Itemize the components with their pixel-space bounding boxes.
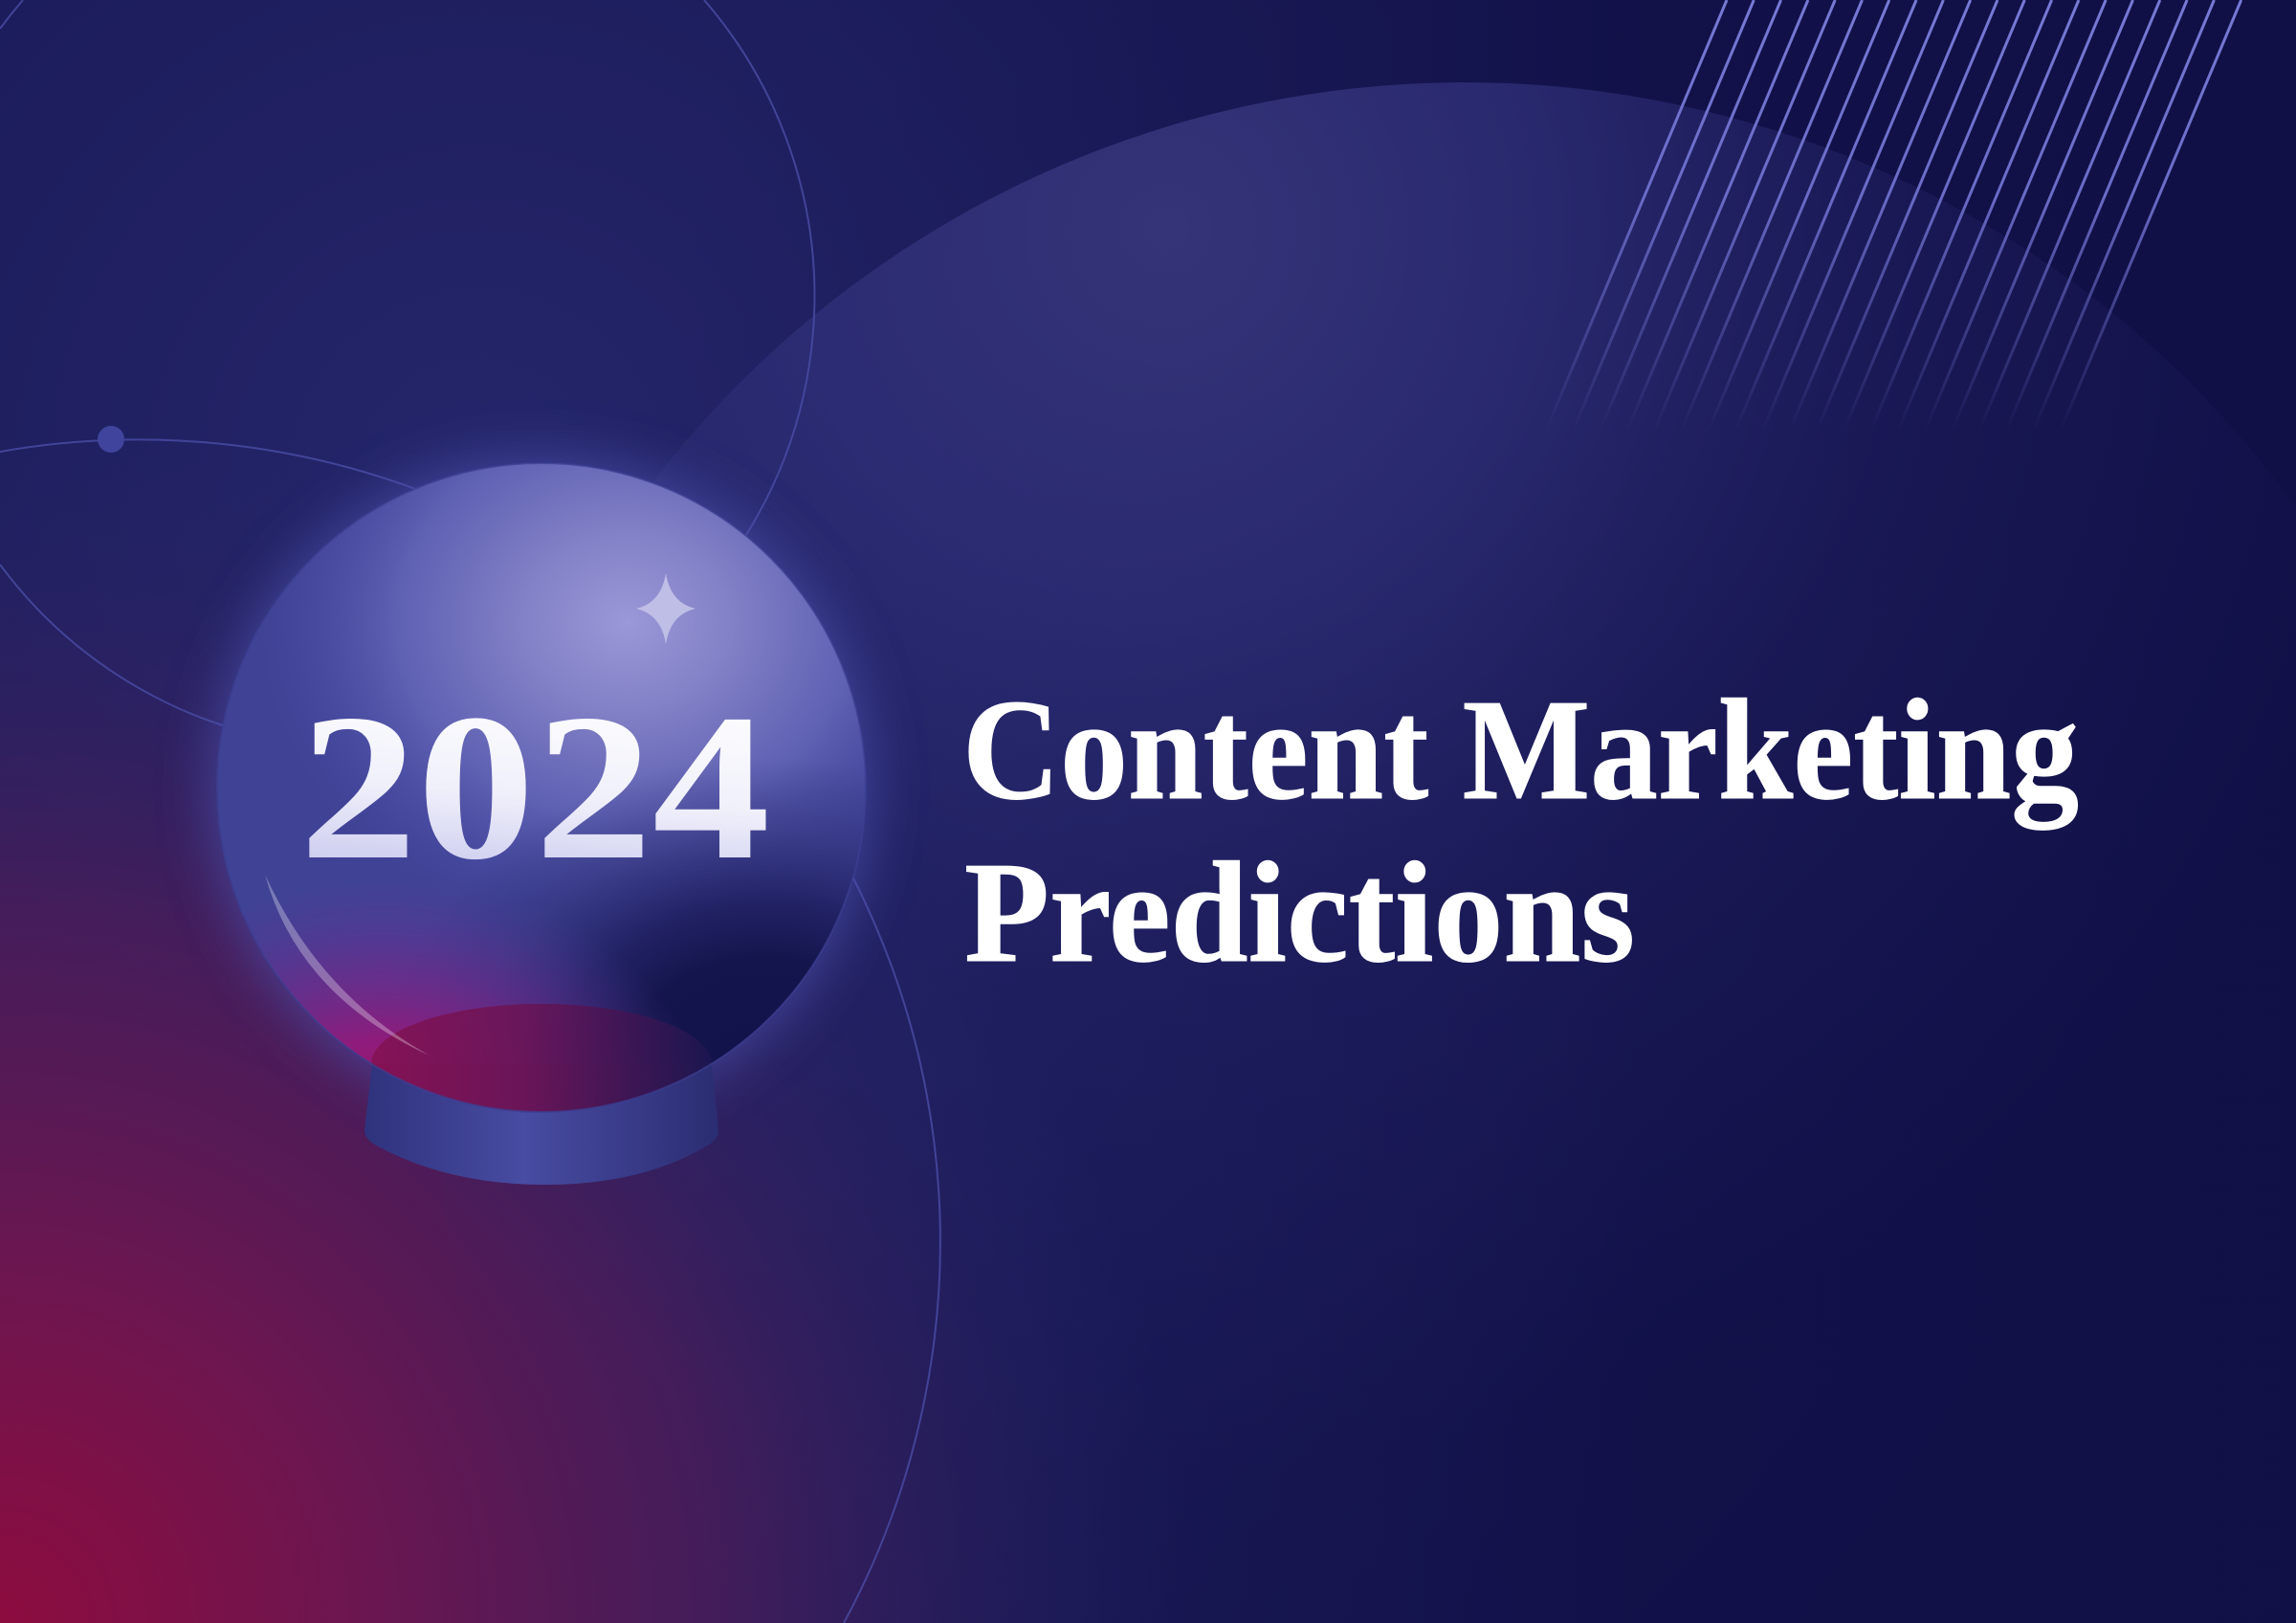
inner stand ellipse: [371, 1004, 712, 1064]
large background circle: [439, 82, 2296, 1623]
ball glow: [211, 457, 872, 1118]
title: Content Marketing: [962, 669, 2079, 830]
glass highlight crescent: [265, 875, 430, 1056]
year label: 2024: [299, 672, 770, 903]
orbit dot: [98, 426, 124, 453]
ball stand: [364, 1064, 718, 1185]
crystal ball: [187, 434, 895, 1185]
title: Predictions: [964, 832, 1635, 992]
sparkle star: [636, 573, 695, 644]
thin orbit circles: [0, 0, 940, 1623]
diagonal stripe pattern: [1546, 0, 2241, 431]
glass sphere: [218, 463, 865, 1112]
title: [962, 669, 2079, 992]
